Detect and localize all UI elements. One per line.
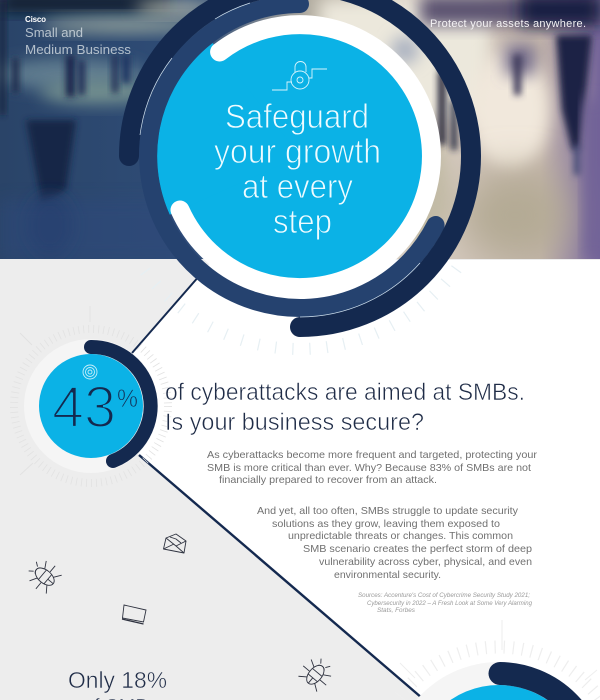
body paragraph one: SMB is more critical than ever. Why? Because 83% of SMBs are not (207, 462, 531, 474)
brand lockup: Medium Business (25, 43, 131, 57)
body paragraph two: environmental security. (334, 569, 441, 581)
body paragraph two: vulnerability across cyber, physical, and even (319, 556, 532, 568)
brand lockup (25, 15, 131, 57)
dark arc (91, 347, 151, 461)
brand lockup: Small and (25, 26, 83, 40)
body paragraph one: financially prepared to recover from an attack. (219, 474, 437, 486)
dark arc (500, 674, 596, 700)
cyan disc (413, 685, 585, 700)
body paragraph two: unpredictable threats or changes. This common (288, 530, 513, 542)
dark navy arc (129, 0, 471, 327)
icon: open envelope (164, 534, 186, 553)
hero title (214, 98, 381, 241)
sources note: Stats, Forbes (377, 607, 416, 614)
hero title: Safeguard (225, 98, 369, 136)
decorative dial ticks around hero circle (178, 266, 462, 355)
cyan disc (157, 32, 424, 280)
stat: 43 percent dial (14, 306, 168, 483)
headline (165, 379, 525, 436)
hero title: step (273, 203, 332, 241)
icon: laptop (122, 605, 146, 624)
hero background photo: blurred commuters (0, 0, 600, 260)
body paragraph two: solutions as they grow, leaving them exposed to (272, 518, 500, 530)
pale halo (24, 339, 158, 473)
dial ticks (14, 306, 168, 483)
body paragraph one: As cyberattacks become more frequent and targeted, protecting your (207, 449, 538, 461)
icon: target (83, 365, 97, 379)
hero title: your growth (214, 133, 381, 171)
thin highlight lines (140, 3, 420, 317)
hero circle with rings (129, 0, 471, 327)
icon: bug left (23, 555, 64, 596)
white content wedge (120, 260, 600, 700)
sources note (358, 592, 532, 614)
headline: of cyberattacks are aimed at SMBs. (165, 379, 525, 406)
figure: 43 (52, 375, 116, 440)
cyan disc (39, 354, 143, 458)
icon: padlock on stairs (272, 62, 327, 90)
tagline: Protect your assets anywhere. (430, 18, 586, 30)
icon: bug right (296, 653, 337, 694)
white arc (180, 25, 431, 288)
headline: Is your business secure? (165, 409, 424, 436)
brand lockup: Cisco (25, 15, 46, 24)
sources note: Cybersecurity in 2022 – A Fresh Look at Some Very Alarming (367, 600, 532, 607)
body paragraph two: And yet, all too often, SMBs struggle to update security (257, 505, 519, 517)
body paragraph two (257, 505, 532, 581)
body paragraph one (207, 449, 538, 486)
medium blue arc (148, 4, 436, 308)
dial ticks (375, 620, 600, 700)
hero title: at every (242, 168, 353, 206)
stat: 43 percent dial: % (117, 385, 138, 413)
sources note: Sources: Accenture's Cost of Cybercrime Security Study 2021; (358, 592, 530, 599)
diagonal connector lines (132, 275, 422, 698)
statistic: only 18 percent: Only 18% (68, 667, 167, 693)
body paragraph two: SMB scenario creates the perfect storm of deep (303, 543, 532, 555)
pale halo (390, 662, 600, 700)
next stat dial, cropped by page bottom (375, 620, 600, 700)
